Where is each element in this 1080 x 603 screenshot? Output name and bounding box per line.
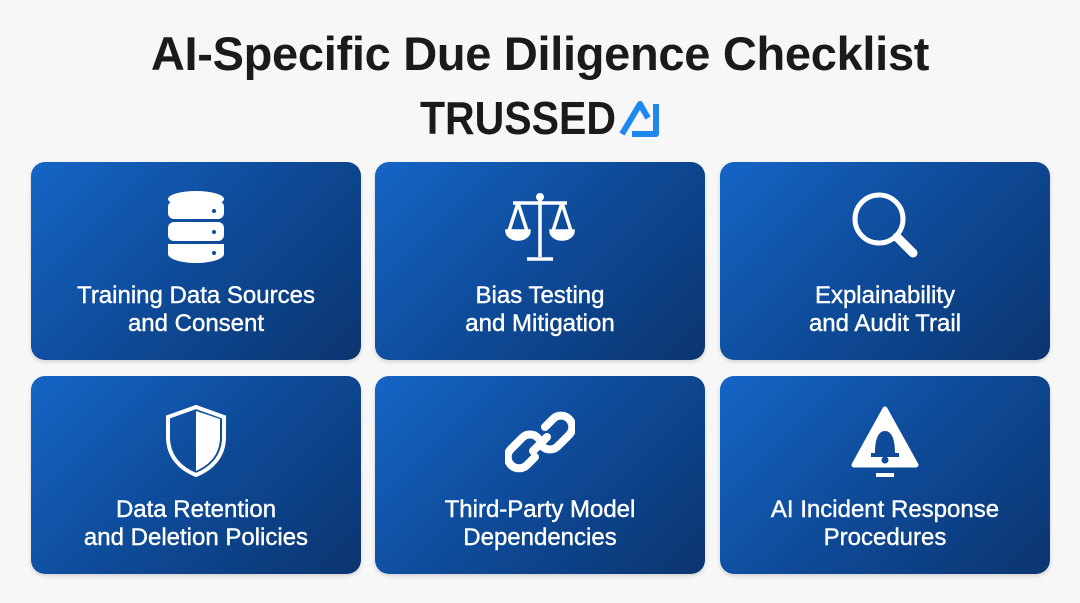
panel: incident bbox=[720, 376, 1050, 574]
text: Training Data Sources bbox=[77, 282, 315, 309]
panel: retention bbox=[31, 376, 361, 574]
title: AI-Specific Due Diligence Checklist bbox=[151, 27, 929, 80]
panel: third-party: Dependencies bbox=[463, 524, 617, 551]
panel: explainability: and Audit Trail bbox=[809, 310, 961, 337]
panel: incident: Procedures bbox=[824, 524, 946, 551]
panel: incident: AI Incident Response bbox=[771, 496, 999, 523]
icon: database bbox=[168, 191, 224, 263]
panel: third-party: Third-Party Model bbox=[445, 496, 635, 523]
icon: alert bell bbox=[852, 406, 918, 477]
icon: shield bbox=[166, 404, 226, 478]
panel: bias: and Mitigation bbox=[465, 310, 615, 337]
panel: retention: and Deletion Policies bbox=[84, 524, 308, 551]
panel: retention: Data Retention bbox=[116, 496, 276, 523]
panel: explainability bbox=[720, 162, 1050, 360]
panel: explainability: Explainability bbox=[815, 282, 955, 309]
icon: scales bbox=[505, 193, 575, 261]
panel: third-party bbox=[375, 376, 705, 574]
icon: magnifier bbox=[852, 192, 918, 258]
panel: training data bbox=[31, 162, 361, 360]
text bbox=[77, 282, 315, 337]
icon: chain link bbox=[505, 412, 575, 472]
panel: bias: Bias Testing bbox=[476, 282, 604, 309]
text: and Consent bbox=[128, 310, 264, 337]
panel: bias bbox=[375, 162, 705, 360]
